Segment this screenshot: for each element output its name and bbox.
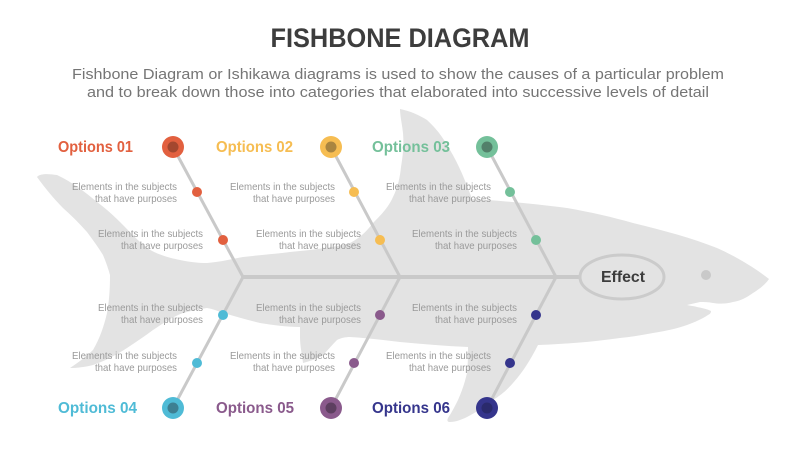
bone: options 03: that have purposes bbox=[435, 240, 517, 252]
bone: options 02: Elements in the subjects bbox=[256, 228, 361, 240]
bone: options 02: that have purposes bbox=[279, 240, 361, 252]
bone: options 05: that have purposes bbox=[253, 362, 335, 374]
bone: options 02: Elements in the subjects bbox=[230, 181, 335, 193]
bone: options 03: Elements in the subjects bbox=[412, 228, 517, 240]
bone: options 04: Options 04 bbox=[58, 400, 137, 417]
description: Fishbone Diagram or Ishikawa diagrams is used to show the causes of a particular problem bbox=[72, 66, 724, 83]
bone: options 01: Elements in the subjects bbox=[98, 228, 203, 240]
description bbox=[72, 66, 724, 101]
description: and to break down those into categories that elaborated into successive levels of detail bbox=[87, 84, 709, 101]
bone: options 02: Options 02 bbox=[216, 139, 293, 156]
bone: options 02 bbox=[216, 136, 400, 277]
bone: options 01: Options 01 bbox=[58, 139, 133, 156]
effect oval: Effect bbox=[601, 269, 645, 286]
bone: options 05 bbox=[216, 277, 400, 419]
bone: options 03: Options 03 bbox=[372, 139, 450, 156]
bone: options 04: that have purposes bbox=[121, 314, 203, 326]
bone: options 05: Options 05 bbox=[216, 400, 294, 417]
bone: options 04 bbox=[58, 277, 243, 419]
shark silhouette bbox=[37, 109, 769, 422]
bone: options 05: Elements in the subjects bbox=[230, 350, 335, 362]
bone: options 03: Elements in the subjects bbox=[386, 181, 491, 193]
bone: options 03 bbox=[372, 136, 556, 277]
title: FISHBONE DIAGRAM bbox=[270, 23, 530, 53]
effect oval bbox=[580, 255, 664, 299]
bone: options 04: Elements in the subjects bbox=[98, 302, 203, 314]
bone: options 01: that have purposes bbox=[95, 193, 177, 205]
bone: options 06: Elements in the subjects bbox=[386, 350, 491, 362]
bone: options 01: Elements in the subjects bbox=[72, 181, 177, 193]
bone: options 06 bbox=[372, 277, 556, 419]
bone: options 05: that have purposes bbox=[279, 314, 361, 326]
bone: options 06: that have purposes bbox=[409, 362, 491, 374]
bone: options 01 bbox=[58, 136, 243, 277]
bone: options 01: that have purposes bbox=[121, 240, 203, 252]
bone: options 04: that have purposes bbox=[95, 362, 177, 374]
shark eye bbox=[701, 270, 711, 280]
bone: options 06: Options 06 bbox=[372, 400, 450, 417]
bone: options 04: Elements in the subjects bbox=[72, 350, 177, 362]
bone: options 02: that have purposes bbox=[253, 193, 335, 205]
bone: options 06: Elements in the subjects bbox=[412, 302, 517, 314]
bone: options 06: that have purposes bbox=[435, 314, 517, 326]
bone: options 05: Elements in the subjects bbox=[256, 302, 361, 314]
bone: options 03: that have purposes bbox=[409, 193, 491, 205]
spine bbox=[243, 275, 580, 279]
